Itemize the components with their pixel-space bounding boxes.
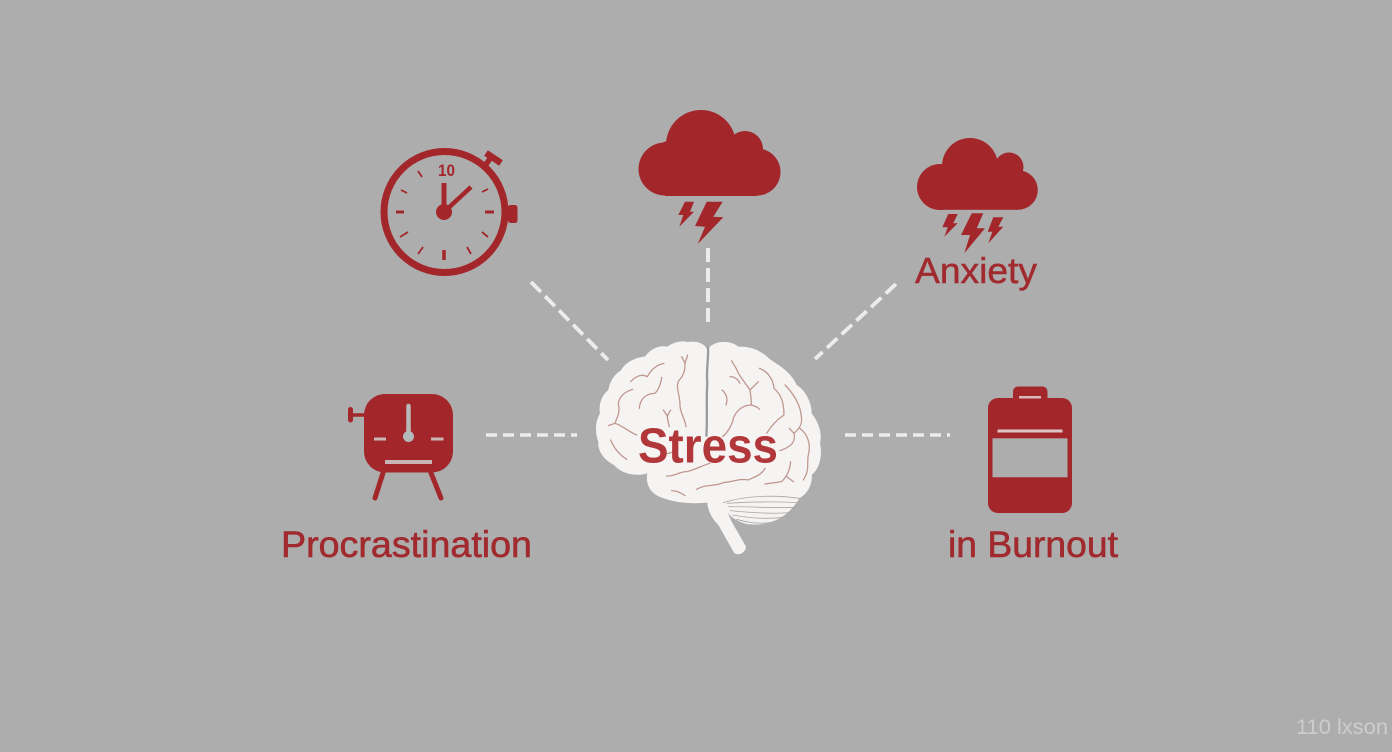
icon: anxiety cloud with three bolts — [917, 138, 1038, 253]
brain with Stress label — [596, 341, 821, 554]
label: Procrastination: Procrastination — [281, 524, 532, 565]
label: Anxiety: Anxiety — [915, 250, 1037, 291]
icon: stopwatch — [384, 152, 518, 272]
dashed connector: brain to burnout — [845, 433, 950, 437]
dashed connector: brain to clock — [531, 282, 608, 360]
label: Stress: Stress — [638, 420, 778, 474]
icon: battery — [988, 386, 1072, 513]
dashed connector: brain to procrastination — [486, 433, 577, 437]
cerebellum lines — [723, 496, 799, 523]
dashed connector: brain to storm cloud — [706, 248, 710, 326]
icon: stopwatch: 10 — [438, 161, 455, 180]
brain silhouette — [596, 341, 821, 554]
watermark: 110 lxson — [1296, 716, 1388, 739]
central fissure — [706, 347, 708, 437]
dashed connector: brain to anxiety — [815, 284, 896, 359]
cortical folds — [608, 355, 809, 496]
label: in Burnout: in Burnout — [948, 524, 1119, 565]
icon: storm cloud with two bolts — [638, 110, 780, 244]
icon: procrastination timer on legs — [350, 394, 453, 498]
